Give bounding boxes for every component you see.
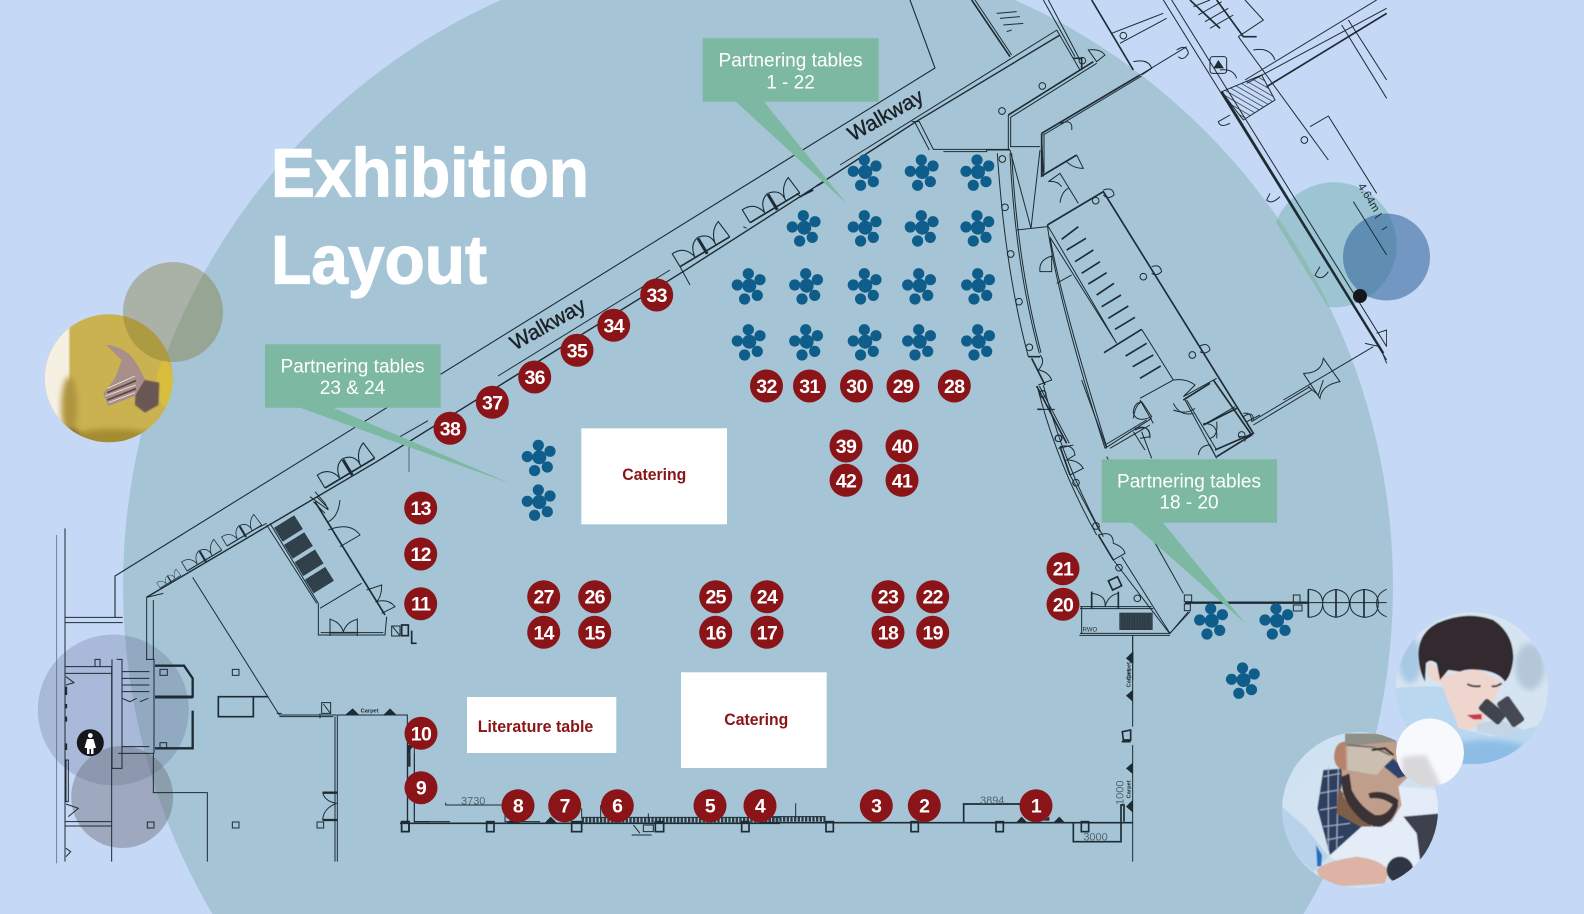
- decorative olive circle: [123, 262, 223, 362]
- stand 8: 8: [513, 796, 524, 818]
- stand 34: 34: [603, 315, 625, 337]
- callout: partnering tables 23 and 24: Partnering tables: [280, 357, 424, 378]
- stand 14: 14: [533, 622, 555, 644]
- catering box south: Catering: [724, 710, 788, 729]
- literature table box: [467, 697, 616, 753]
- stand 5: 5: [705, 796, 716, 818]
- stand 19: [916, 616, 949, 649]
- stand 20: 20: [1053, 594, 1074, 616]
- stand 30: 30: [846, 376, 867, 398]
- stand 14: [527, 616, 560, 649]
- stand 40: 40: [892, 436, 913, 458]
- stand 2: [908, 789, 941, 822]
- stand 24: [750, 580, 784, 613]
- stand 10: 10: [411, 723, 432, 745]
- decorative grey circle lower left: [71, 746, 173, 848]
- stand 28: 28: [944, 376, 965, 398]
- walkway walls: [115, 0, 1060, 617]
- table cluster row 2: [787, 210, 994, 247]
- partnering table clusters: [522, 154, 1293, 699]
- stand 6: [601, 789, 634, 822]
- stand 22: 22: [922, 587, 944, 609]
- title: [271, 135, 589, 298]
- stand 1: [1020, 789, 1052, 822]
- translucent white circle between photos: [1396, 718, 1464, 790]
- black dot marker: [1353, 289, 1367, 303]
- stand 38: [434, 412, 466, 445]
- literature table box: Literature table: [478, 717, 593, 736]
- callout: partnering tables 1 - 22: Partnering tables: [718, 51, 862, 72]
- stand 8: [502, 789, 534, 822]
- small stair detail above wing: [257, 492, 328, 528]
- north east service block: [972, 0, 1388, 400]
- catering box north: [581, 428, 727, 524]
- stand 12: 12: [410, 544, 432, 566]
- callout: partnering tables 1 - 22: [703, 38, 879, 203]
- stand 24: 24: [757, 587, 778, 609]
- stand 5: [694, 789, 726, 822]
- stand 2: 2: [919, 796, 930, 818]
- stand 25: [699, 580, 732, 613]
- stand 26: [578, 580, 611, 613]
- entrance doors along walkway: [156, 177, 801, 589]
- stand 1: 1: [1031, 796, 1042, 818]
- title: Layout: [271, 221, 487, 298]
- catering box south: [681, 672, 827, 768]
- stand 40: [886, 430, 918, 462]
- decorative navy circle lower left: [38, 634, 189, 786]
- stand 31: [793, 370, 826, 402]
- stand 32: [750, 370, 783, 402]
- stand 9: [404, 771, 438, 804]
- east curved wall and plant room: [1037, 380, 1387, 680]
- stand 39: 39: [836, 436, 857, 458]
- stand 9: 9: [416, 778, 427, 800]
- east curved wall and plant room: RWO: [1083, 628, 1098, 634]
- stand 41: [886, 464, 918, 497]
- stand 25: 25: [705, 587, 727, 609]
- stand 41: 41: [892, 470, 913, 492]
- stand 27: [527, 580, 560, 613]
- stand 35: [560, 334, 594, 367]
- south wall west section: [400, 740, 780, 835]
- stand 18: [872, 616, 904, 649]
- stand 20: [1046, 588, 1080, 621]
- stand 6: 6: [612, 796, 623, 818]
- callout: partnering tables 18 - 20: 18 - 20: [1159, 493, 1219, 514]
- stand 42: [830, 464, 862, 497]
- stand 11: 11: [411, 594, 431, 616]
- callout: partnering tables 1 - 22: 1 - 22: [766, 72, 815, 93]
- stand 4: [744, 789, 776, 822]
- stand 23: [872, 580, 904, 613]
- stand 19: 19: [922, 622, 944, 644]
- title: Exhibition: [271, 135, 589, 212]
- stand 3: 3: [871, 796, 882, 818]
- stand 29: [886, 370, 920, 402]
- stand 15: [578, 616, 611, 649]
- stand 38: 38: [440, 418, 461, 440]
- south and east wall east section: Carpet: [1127, 669, 1133, 687]
- stand 36: 36: [524, 367, 546, 389]
- table clusters 18 to 20: [1194, 603, 1293, 699]
- stand 15: 15: [584, 622, 606, 644]
- south and east wall east section: Carpet: [1127, 780, 1133, 798]
- south and east wall east section: 3000: [1083, 831, 1108, 843]
- table cluster row 4: [732, 324, 995, 361]
- photo: outstretched hand: [44, 314, 173, 442]
- south wall west section: 3730: [461, 795, 485, 807]
- stand 30: [840, 370, 873, 402]
- north east service block: 4.64m: [1355, 181, 1382, 214]
- decorative blue circle top right: [1343, 214, 1430, 300]
- stand 26: 26: [584, 587, 606, 609]
- catering box north: Catering: [622, 465, 686, 484]
- stand 33: 33: [646, 285, 668, 307]
- stand 31: 31: [799, 376, 820, 398]
- stand 34: [597, 309, 630, 342]
- stand 17: [750, 616, 784, 649]
- stand 16: [699, 616, 732, 649]
- table cluster row 1: [848, 154, 994, 191]
- east curved wall and plant room: Carpet: [1127, 662, 1133, 680]
- stand 7: 7: [560, 796, 570, 818]
- floor plan line drawing: [57, 0, 1388, 863]
- photo: man at microscope: [1282, 732, 1438, 888]
- numbered stand markers: [404, 278, 1080, 822]
- stand 13: [404, 492, 437, 524]
- walkway label north: Walkway: [844, 85, 928, 146]
- south and east wall east section: 1000: [1114, 781, 1126, 805]
- south and east wall east section: [760, 635, 1133, 862]
- stand 13: 13: [410, 498, 432, 520]
- stand 35: 35: [567, 340, 588, 362]
- north hall stub wall: [680, 122, 1010, 285]
- stand 36: [518, 360, 551, 394]
- stand 21: 21: [1053, 559, 1074, 581]
- walkway label south: Walkway: [506, 294, 590, 355]
- stand 39: [830, 430, 862, 462]
- stand 17: 17: [757, 622, 777, 644]
- stand 10: [404, 717, 438, 750]
- stand 29: 29: [893, 376, 914, 398]
- photo: woman at microscope: [1393, 610, 1550, 770]
- stand 7: [548, 789, 581, 822]
- table clusters 23 and 24: [522, 440, 556, 521]
- callout: partnering tables 23 and 24: 23 & 24: [320, 378, 386, 399]
- stand 28: [938, 370, 971, 402]
- decorative teal circle top right: [1276, 182, 1397, 307]
- stand 21: [1046, 552, 1080, 585]
- stand 12: [404, 538, 437, 570]
- callout: partnering tables 23 and 24: [265, 344, 512, 484]
- stand 11: [404, 587, 437, 620]
- callout: partnering tables 18 - 20: Partnering tables: [1117, 471, 1261, 492]
- icon: accessible toilet / person marker: [77, 729, 104, 756]
- stand 18: 18: [878, 622, 899, 644]
- table cluster row 3: [732, 268, 995, 305]
- south and east wall east section: 3894: [980, 795, 1004, 807]
- west wing plan: Carpet: [361, 709, 379, 715]
- stand 32: 32: [756, 376, 777, 398]
- stand 27: 27: [533, 587, 554, 609]
- stand 16: 16: [705, 622, 727, 644]
- stand 23: 23: [878, 587, 899, 609]
- stand 37: 37: [482, 392, 503, 414]
- stand 33: [640, 278, 673, 312]
- central curved corridor and service rooms: [997, 133, 1260, 450]
- stand 3: [860, 789, 893, 822]
- stand 37: [476, 386, 509, 419]
- stand 22: [916, 580, 949, 613]
- stand 42: 42: [836, 470, 857, 492]
- west wing plan: [57, 500, 450, 863]
- stand 4: 4: [755, 796, 766, 818]
- callout: partnering tables 18 - 20: [1102, 459, 1277, 623]
